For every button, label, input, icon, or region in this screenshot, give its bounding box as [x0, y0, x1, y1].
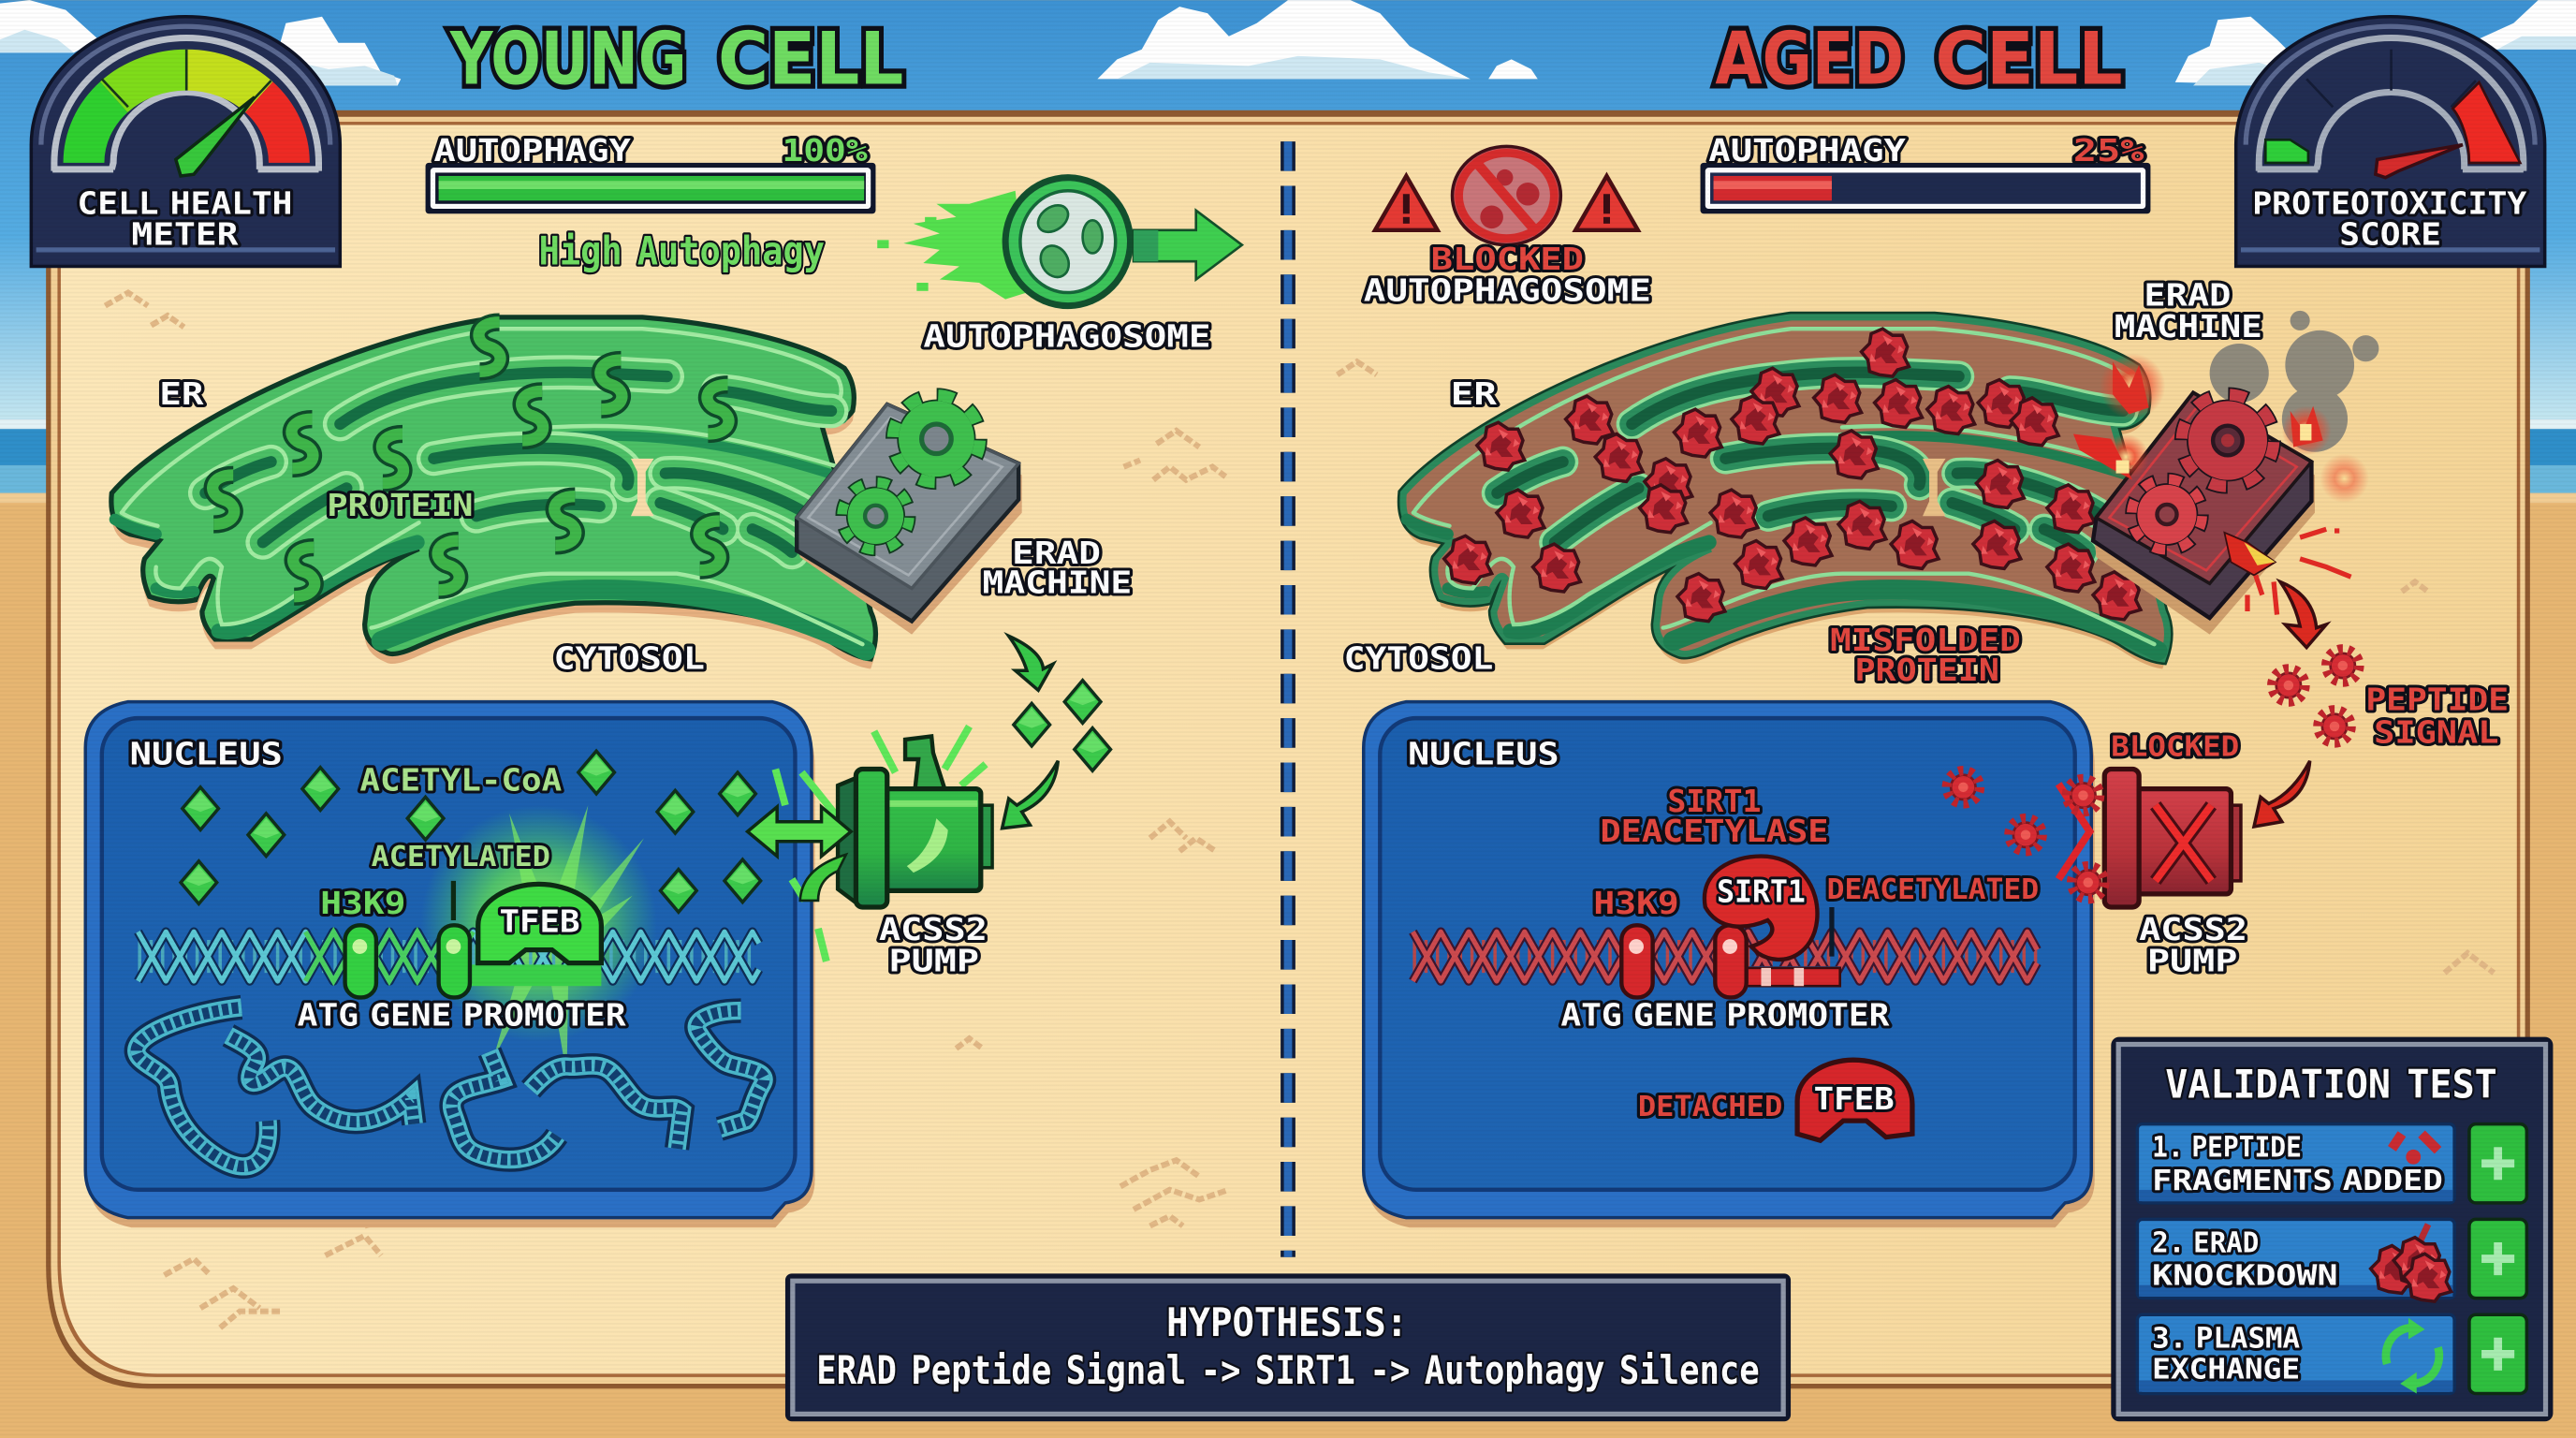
test 1: peptide fragments: 1. PEPTIDE [2152, 1132, 2302, 1165]
cell health meter gauge [31, 17, 340, 266]
broken gears [2131, 394, 2274, 550]
gauge label [77, 184, 292, 253]
sand dune marks [105, 293, 2494, 1328]
icon: autophagosome [877, 174, 1242, 354]
test 2: ERAD knockdown: KNOCKDOWN [2152, 1260, 2338, 1293]
labels: young ER: ERAD [1012, 535, 1101, 571]
young ACSS2 pump: PUMP [889, 942, 979, 978]
SIRT1 enzyme [1705, 857, 1817, 960]
nucleus labels: H3K9 [320, 885, 406, 921]
nucleus labels: ATG GENE PROMOTER [298, 996, 627, 1033]
title: aged cell: AGED [1715, 18, 1904, 102]
test 1: peptide fragments [2137, 1124, 2526, 1203]
labels: young ER: ER [159, 375, 205, 412]
aged ACSS2 pump blocked [2058, 730, 2310, 978]
autophagy bar: aged 25% [1701, 132, 2150, 213]
nucleus labels: SIRT1 [1667, 783, 1761, 819]
panel: young nucleus [85, 702, 815, 1227]
peptide signal cluster [2272, 581, 2509, 750]
icon: blocked autophagosome: BLOCKED [1431, 241, 1584, 277]
histone markers and promoter bar [345, 881, 601, 997]
title: young cell: YOUNG [449, 18, 687, 102]
aged ERAD machine (broken) [2073, 353, 2369, 635]
labels: aged ER: ER [1451, 375, 1498, 412]
hypothesis box: ERAD Peptide Signal -> SIRT1 -> Autophagy Silence [816, 1347, 1760, 1393]
TFEB detached: TFEB [1814, 1080, 1895, 1117]
aged ACSS2 pump blocked: BLOCKED [2111, 730, 2239, 763]
title: aged cell [1715, 18, 2123, 102]
title: young cell: CELL [718, 18, 903, 102]
nucleus labels [1408, 735, 2039, 1033]
nucleus labels: DEACETYLASE [1600, 813, 1828, 849]
autophagy bar: young 100%: 100% [782, 132, 868, 169]
panel: aged nucleus [1364, 702, 2095, 1227]
young ERAD machine [795, 395, 1022, 635]
TFEB protein bound: TFEB [500, 902, 580, 939]
fire sparks [2073, 353, 2369, 615]
clouds [0, 0, 2576, 85]
SIRT1 enzyme: SIRT1 [1717, 873, 1806, 910]
title: young cell [449, 18, 903, 102]
aged ACSS2 pump blocked: PUMP [2147, 942, 2237, 978]
labels: aged ER: MACHINE [2115, 308, 2262, 345]
test 3: plasma exchange: 3. PLASMA [2152, 1322, 2300, 1355]
title: aged cell: CELL [1936, 18, 2123, 102]
test 2: ERAD knockdown [2137, 1219, 2526, 1301]
DNA helix [138, 932, 759, 981]
glow behind TFEB [420, 805, 657, 1077]
smoke [2210, 311, 2378, 452]
gauge label: CELL HEALTH [77, 184, 292, 221]
gauge label [2252, 184, 2526, 253]
labels: aged ER: ERAD [2144, 277, 2231, 314]
chromatin tangles [137, 1007, 764, 1167]
labels: aged ER: CYTOSOL [1344, 639, 1493, 676]
young ER membrane [111, 317, 875, 668]
peptide stars in nucleus [1947, 770, 2042, 851]
TFEB detached [1638, 1060, 1912, 1140]
gauge label: METER [131, 216, 240, 253]
proteotoxicity score gauge [2236, 17, 2545, 266]
hypothesis box [785, 1273, 1791, 1421]
labels: young ER: MACHINE [983, 565, 1132, 601]
autophagy bar: aged 25%: AUTOPHAGY [1708, 132, 1906, 169]
peptide signal cluster: PEPTIDE [2365, 681, 2509, 717]
gauge label: PROTEOTOXICITY [2252, 184, 2526, 221]
DNA helix [1412, 932, 2037, 981]
labels: young ER: CYTOSOL [553, 639, 705, 676]
nucleus labels: ACETYLATED [372, 841, 550, 873]
histone markers and deacetylated bar [1621, 907, 1840, 997]
TFEB detached: DETACHED [1638, 1091, 1782, 1123]
test 2: ERAD knockdown: 2. ERAD [2152, 1227, 2259, 1260]
autophagy bar: young 100%: AUTOPHAGY [433, 132, 631, 169]
peptide signal cluster: SIGNAL [2374, 713, 2499, 750]
hypothesis box: HYPOTHESIS: [1166, 1299, 1408, 1345]
nucleus labels: H3K9 [1593, 885, 1679, 921]
gauge label: SCORE [2339, 216, 2441, 253]
test 3: plasma exchange [2137, 1314, 2526, 1393]
aged ER membrane [1403, 317, 2168, 668]
test 1: peptide fragments: FRAGMENTS ADDED [2152, 1165, 2443, 1197]
icon: blocked autophagosome: AUTOPHAGOSOME [1364, 271, 1651, 308]
double arrow [748, 807, 851, 857]
labels: aged ER: PROTEIN [1855, 652, 1999, 688]
nucleus labels: NUCLEUS [130, 735, 283, 771]
gears [842, 395, 980, 550]
TFEB protein bound [478, 884, 601, 963]
young ACSS2 pump: ACSS2 [879, 911, 988, 947]
panel: validation test [2111, 1037, 2553, 1421]
folded proteins [212, 322, 728, 596]
aged ACSS2 pump blocked: ACSS2 [2139, 911, 2247, 947]
validation heading: VALIDATION TEST [2165, 1062, 2497, 1108]
nucleus labels: ATG GENE PROMOTER [1560, 996, 1890, 1033]
labels: young ER [159, 375, 1132, 676]
high autophagy label: High Autophagy [539, 228, 825, 274]
nucleus labels: DEACETYLATED [1827, 873, 2039, 906]
young ACSS2 pump [748, 726, 992, 978]
acetyl-CoA diamonds [181, 751, 761, 912]
nucleus labels: NUCLEUS [1408, 735, 1559, 771]
autophagy bar: aged 25%: 25% [2073, 132, 2144, 169]
icon: autophagosome: AUTOPHAGOSOME [923, 317, 1211, 354]
labels: aged ER [1344, 277, 2262, 688]
labels: aged ER: MISFOLDED [1830, 622, 2021, 658]
nucleus labels: ACETYL-CoA [359, 761, 562, 798]
misfolded protein clumps [1444, 329, 2141, 622]
autophagy bar: young 100% [426, 132, 875, 213]
icon: blocked autophagosome [1364, 146, 1651, 308]
divider dashed line [1284, 141, 1292, 1257]
young diamonds and arrows outside nucleus [1003, 636, 1110, 829]
labels: young ER: PROTEIN [327, 487, 473, 523]
test 3: plasma exchange: EXCHANGE [2152, 1354, 2300, 1387]
nucleus labels [130, 735, 627, 1033]
